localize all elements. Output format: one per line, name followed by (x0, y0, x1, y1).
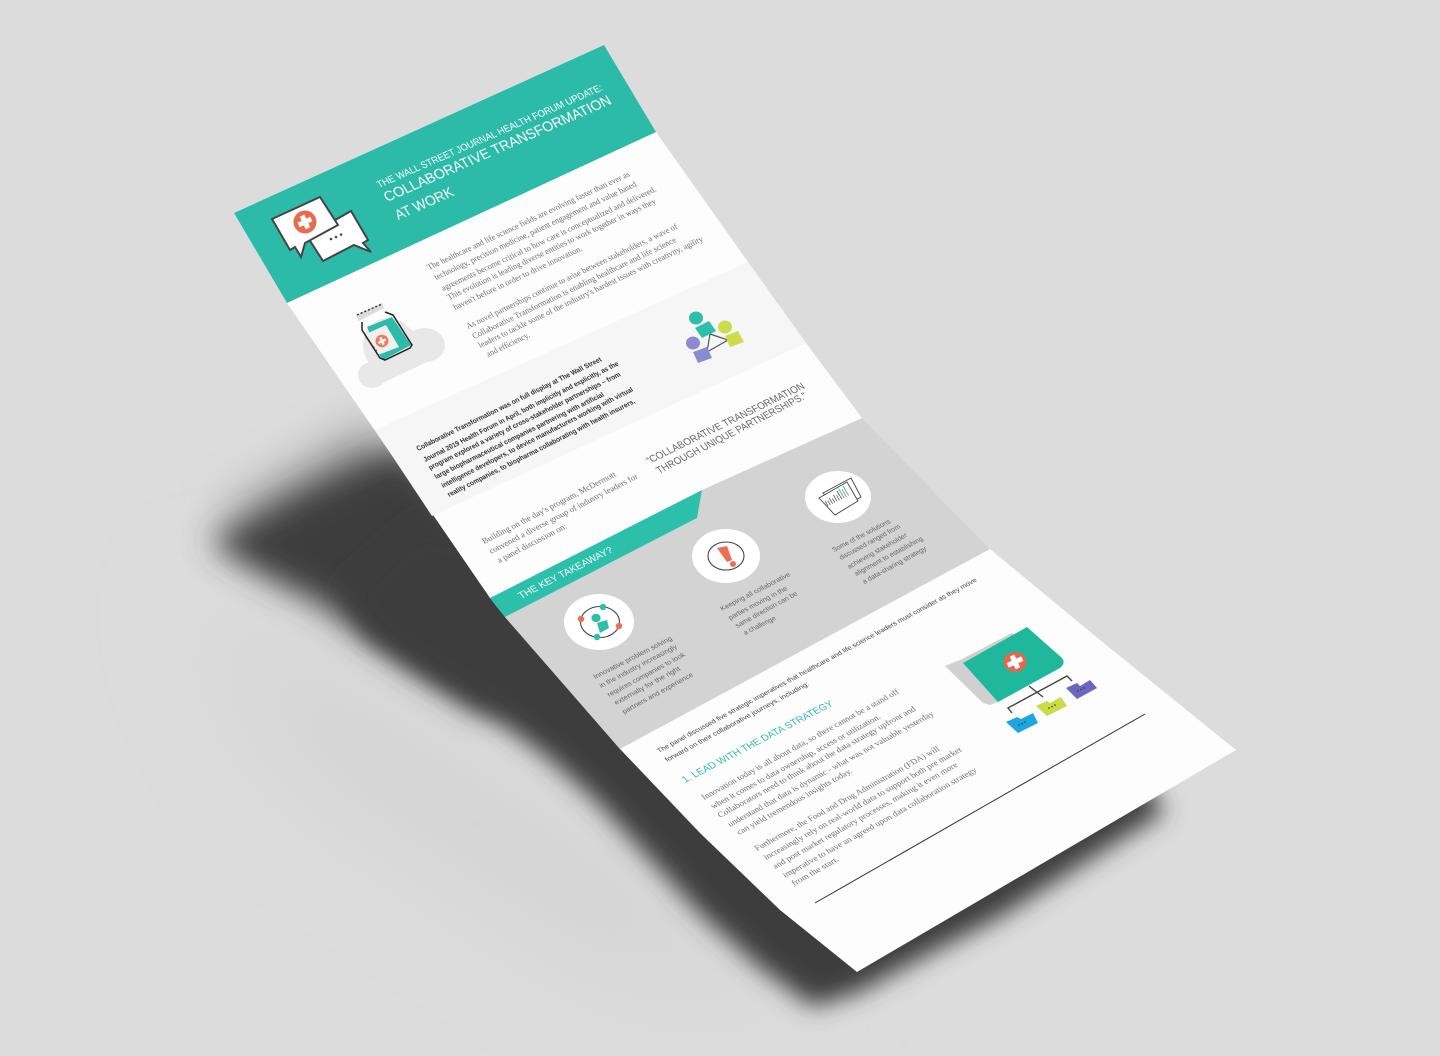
program intro text: a panel discussion on: (495, 521, 569, 565)
intro paragraphs (425, 169, 705, 359)
intro paragraphs: and efficiency. (484, 330, 532, 359)
intro paragraphs: leaders to tackle some of the industry's hardest issues with creativity, agility (476, 234, 705, 350)
infographic sheet (234, 45, 1236, 972)
bold summary text: Journal 2019 Health Forum in April, both implicitly and explicitly, as the (421, 359, 620, 464)
data strategy paragraphs: Innovation today is all about data, so there cannot be a stand off (699, 687, 901, 802)
icon: folder tree (945, 627, 1097, 733)
takeaway 2: a challenge (742, 615, 778, 637)
takeaway 3: discussed ranged from (838, 524, 902, 562)
intro paragraphs: technology, precision medicine, patient engagement and value based (432, 179, 639, 282)
intro paragraphs: As novel partnerships continue to arise between stakeholders, a wave of (464, 221, 679, 331)
header panel (234, 45, 656, 303)
takeaway 1: Innovative problem solving (592, 636, 674, 681)
sheet background (234, 45, 1236, 972)
paper shadow: upper wedge (212, 448, 530, 712)
heading: lead with the data strategy: 1. LEAD WITH THE DATA STRATEGY (680, 699, 836, 785)
data strategy paragraphs (699, 687, 979, 888)
takeaway 3: a data-sharing strategy (861, 546, 929, 586)
data strategy paragraphs: from the start. (789, 855, 841, 888)
data strategy paragraphs: Furthermore, the Food and Drug Administration (FDA) will (752, 744, 942, 853)
takeaway 3: achieving stakeholder (846, 532, 910, 571)
bold summary text: reality companies, to biopharma collaborating with health insurers, (445, 397, 637, 499)
takeaway 2: parties moving in the (727, 586, 789, 622)
banner: the key takeaway (490, 490, 702, 617)
takeaway 2 (692, 529, 799, 637)
icon: partnership triangle (686, 312, 744, 363)
icon: medicine bottle on cloud (356, 303, 445, 388)
bold summary text: program explored a variety of cross-stakeholder partnerships – from (426, 370, 622, 472)
takeaway 3 (805, 471, 929, 586)
data strategy paragraphs: imperative to have an agreed upon data collaboration strategy (780, 765, 979, 880)
takeaway 2: same direction can be (734, 591, 799, 630)
takeaway 3: alignment to establishing (853, 536, 925, 578)
takeaway 1: in the industry increasingly (598, 644, 679, 690)
pull quote: THROUGH UNIQUE PARTNERSHIPS.” (654, 391, 810, 476)
takeaway 1 (564, 594, 695, 716)
panel intro text: The panel discussed five strategic imperatives that healthcare and life science leaders must consider as they move (656, 577, 979, 755)
takeaway 3: Some of the solutions (831, 518, 893, 554)
data strategy paragraphs: Collaborators need to think about the data strategy upfront and (715, 704, 918, 820)
bold summary text: large biopharmaceutical companies partnering with artificial (432, 390, 606, 481)
header title: COLLABORATIVE TRANSFORMATION (381, 93, 615, 205)
intro paragraphs: agreements become critical to how care is conceptualized and delivered. (439, 184, 658, 293)
intro paragraphs: haven't before in order to drive innovation. (451, 244, 584, 312)
data strategy paragraphs: understand that data is dynamic - what was not valuable yesterday (725, 709, 937, 829)
banner: the key takeaway: THE KEY TAKEAWAY? (516, 545, 616, 601)
panel: key takeaway (490, 418, 990, 749)
takeaway 1: partners and experience (621, 672, 695, 716)
intro paragraphs: The healthcare and life science fields are evolving faster than ever as (425, 169, 632, 272)
paper shadow: soft upper falloff (220, 425, 450, 560)
data strategy paragraphs: and post market regulatory processes, making it even more (770, 760, 960, 871)
intro paragraphs: Collaborative Transformation is enabling healthcare and life science (470, 235, 678, 341)
panel intro text: forward on their collaborative journeys, including: (664, 681, 811, 764)
light band (375, 262, 806, 516)
program intro text: Building on the day's program, McDermott (480, 469, 618, 546)
soft ambient shadow (200, 590, 820, 1010)
program intro text: convened a diverse group of industry leaders for (487, 471, 640, 556)
takeaway 1: externally for the right (613, 666, 682, 707)
bold summary text: intelligence developers, to device manufacturers working with virtual (439, 385, 635, 490)
data strategy paragraphs: when it comes to data ownership, access or utilization. (708, 712, 883, 811)
paper shadow: lower band (340, 520, 1165, 1007)
takeaway 2: Keeping all collaborative (719, 572, 792, 613)
pull quote: “COLLABORATIVE TRANSFORMATION (644, 381, 807, 466)
header title: AT WORK (392, 185, 457, 223)
takeaway 1: requires companies to look (606, 652, 687, 699)
icon: speech bubbles (272, 197, 371, 261)
data strategy paragraphs: can yield tremendous insights today. (734, 766, 854, 837)
header title: THE WALL STREET JOURNAL HEALTH FORUM UPDATE: (375, 83, 605, 191)
intro paragraphs: This evolution is leading diverse entities to work together in ways they (445, 196, 658, 302)
data strategy paragraphs: increasingly rely on real-world data to support both pre market (761, 745, 964, 862)
bold summary text: Collaborative Transformation was on full display at The Wall Street (414, 355, 604, 453)
